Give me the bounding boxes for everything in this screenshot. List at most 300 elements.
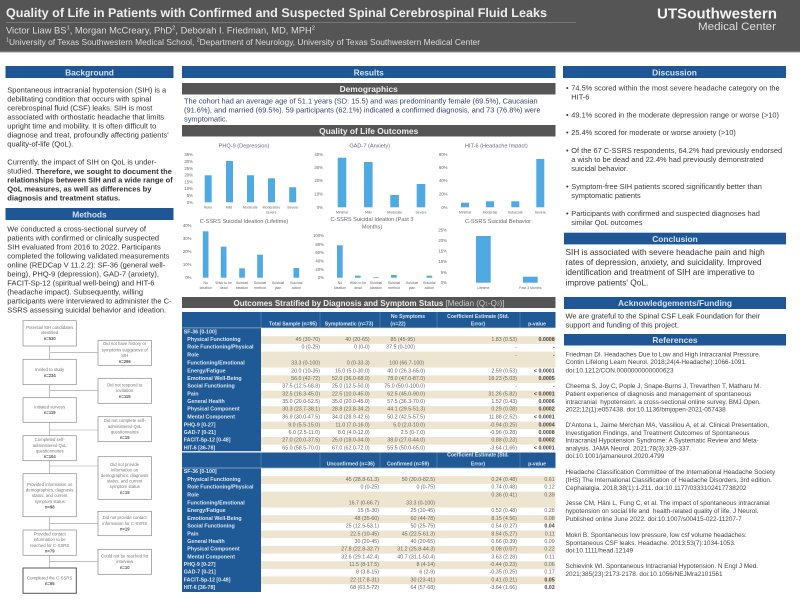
heading: outcomes stratified [182, 297, 556, 308]
list: discussion bullets: symptomatic patients [571, 191, 641, 200]
table: outcomes by symptom status: PHQ-9 [0-27] [184, 422, 216, 428]
table: outcomes by diagnosis: 27.8 (22.8-32.7) [341, 547, 379, 553]
table: outcomes by diagnosis: 8.15 (4.56) [491, 516, 517, 522]
flow box: completed questionnaires [23, 436, 76, 461]
bar chart: C-SSRS suicidal ideation lifetime: 30% [183, 236, 192, 241]
table: outcomes by diagnosis: FACIT-Sp-12 [0-48] [184, 577, 231, 583]
table: outcomes by diagnosis: PHQ-9 [0-27] [184, 562, 216, 568]
flow box: provided contact: Provided contact [34, 532, 67, 536]
heading: outcomes stratified: 1 [485, 302, 488, 308]
table: outcomes by symptom status: 57.5 (36.3-70.0) [387, 399, 425, 405]
text: background body: quality-of-life (QoL). [7, 140, 73, 148]
table: outcomes by symptom status: GAD-7 [0-21] [184, 430, 216, 436]
table: outcomes by diagnosis: Physical Component [187, 547, 240, 553]
table: outcomes by symptom status: 8.0 (4.0-12.0) [338, 430, 370, 436]
text: background body: diagnose and treat, profoundly affecting patients' [7, 130, 169, 140]
bar chart: HIT-6: 40% [439, 178, 448, 183]
text: background body [7, 86, 173, 202]
heading: quality of life outcomes [182, 125, 556, 136]
text: background body: Spontaneous intracranial hypotension (SIH) is a [7, 86, 167, 94]
table: outcomes by diagnosis: 8 (4-14) [416, 562, 435, 568]
flow box: provided demographics: symptom status [35, 499, 65, 504]
bar chart: C-SSRS suicidal behavior: 20% [438, 238, 447, 243]
list: references: Friedman DI. Headaches Due to Low and High Intracranial Pressure. [566, 352, 761, 358]
table: outcomes by symptom status: 0 (0-25) [301, 345, 320, 351]
bar chart: C-SSRS suicidal ideation lifetime: Wish to be [215, 281, 232, 285]
list: discussion bullets: 25.4% scored for moderate or worse anxiety (>10) [571, 128, 736, 137]
flow box: completed C-SSRS: Completed the C-SSRS [27, 576, 73, 580]
table: outcomes by diagnosis: 31.2 (25.8-44.3) [397, 547, 435, 553]
table: outcomes by symptom status: 0.0002 [538, 438, 555, 444]
text: acknowledgements body [566, 312, 761, 330]
table: outcomes by diagnosis: -0.44 (0.23) [490, 562, 517, 568]
flow box: invited: n=234 [44, 373, 56, 378]
flow box: no response: n=115 [119, 394, 131, 399]
bar chart: C-SSRS suicidal ideation lifetime: ideation [200, 286, 212, 290]
heading: discussion: Discussion [652, 67, 697, 77]
table: outcomes by symptom status: 52.0 (36.0-68.0) [332, 376, 370, 382]
bar chart: PHQ-9 [184, 144, 298, 214]
table: outcomes by diagnosis: GAD-7 [0-21] [184, 570, 216, 576]
text: conclusion body: improve patients' QoL. [566, 277, 648, 287]
bar chart: PHQ-9: 20% [184, 172, 193, 178]
table: outcomes by symptom status: FACIT-Sp-12 [0-48] [184, 438, 231, 444]
flow box: excluded no history: n=296 [119, 359, 131, 364]
bar chart: GAD-7: Severe [415, 210, 427, 214]
table: outcomes by symptom status: 35.0 (20.0-45.0) [332, 399, 370, 405]
table: outcomes by symptom status: - [515, 353, 517, 359]
table: outcomes by diagnosis: -0.35 (0.25) [490, 570, 517, 576]
table: outcomes by symptom status: p-value [528, 322, 546, 328]
table: outcomes by symptom status: 0.29 (0.08) [491, 407, 517, 413]
table: outcomes by symptom status: 50.2 (42.5-57.5) [387, 415, 425, 421]
text: demographics: (91.6%), and married (69.5%). 59 participants (62.1%) indicated a confirmed diagnosis, and 73 (76.8%) were [184, 106, 541, 114]
flow box: completed C-SSRS [23, 568, 76, 593]
list: discussion bullets: • [566, 182, 569, 191]
table: outcomes by symptom status: - [515, 345, 517, 351]
table: outcomes by diagnosis: 0.22 [544, 547, 555, 553]
bar chart: C-SSRS suicidal ideation past 3 months: Suicidal [370, 281, 382, 285]
table: outcomes by symptom status: Social Functioning [187, 384, 235, 390]
table: outcomes by symptom status: General Health [187, 399, 225, 405]
table: outcomes by diagnosis: Unconfirmed (n=36) [327, 461, 375, 467]
text: conclusion body: rates of depression, anxiety, and suicidality. Improved [566, 257, 762, 267]
table: outcomes by diagnosis: 11.5 (8-17.5) [349, 562, 379, 568]
list: discussion bullets: • [566, 110, 569, 120]
flow box: no demographics: Did not provide [110, 462, 140, 467]
bar chart: C-SSRS suicidal ideation past 3 months: Suicidal [423, 281, 436, 285]
heading: outcomes stratified: Outcomes Stratified by Diagnosis and Symptom Status [Median (Q [234, 298, 485, 308]
table: outcomes by diagnosis: -3.64 (1.66) [490, 585, 517, 591]
flow box: incomplete questionnaires: questionnaires [111, 430, 139, 434]
flow box: no response [98, 378, 152, 403]
authors: 1 [66, 26, 70, 32]
list: references [566, 352, 776, 578]
bar chart: C-SSRS suicidal ideation lifetime: 40% [183, 223, 192, 228]
text: background body: QoL measures, as well as differences by [7, 184, 152, 194]
table: outcomes by symptom status: 37.5 (12.5-68.8) [282, 384, 320, 390]
list: references: Jesse CM, Häni L, Fung C, et al. The impact of spontaneous intracranial [566, 500, 770, 507]
list: discussion bullets: suicidal behavior. [571, 164, 628, 173]
bar chart: C-SSRS suicidal ideation past 3 months: C-SSRS Suicidal Ideation (Past 3 [330, 217, 414, 223]
table: outcomes by diagnosis: 33.3 (0-100) [406, 501, 435, 507]
table: outcomes by diagnosis: General Health [187, 539, 225, 545]
list: discussion bullets: • [566, 209, 569, 218]
flow box: not reached: n=10 [120, 565, 130, 570]
table: outcomes by symptom status: 56.0 (42-72) [291, 376, 320, 382]
table: outcomes by symptom status: 25.0 (12.5-50.0) [332, 384, 370, 390]
table: outcomes by symptom status: 37.5 (0-100) [386, 345, 415, 351]
bar chart: C-SSRS suicidal ideation past 3 months: 0% [318, 275, 324, 280]
list: references: intracranial hypotension: a cross-sectional online survey. BMJ Open. [566, 399, 761, 406]
table: outcomes by symptom status: Physical Component [187, 407, 240, 413]
table: outcomes by symptom status: - [553, 384, 555, 390]
flow box: excluded no history [98, 340, 152, 365]
table: outcomes by symptom status: Physical Functioning [187, 337, 241, 343]
table: outcomes by diagnosis: Mental Component [187, 554, 235, 560]
table: outcomes by symptom status: < 0.0001 [534, 446, 555, 452]
heading: outcomes stratified: )] [500, 298, 504, 308]
flow box: candidates: n=530 [44, 336, 56, 341]
flow box: no demographics: demographics, diagnosis [101, 473, 148, 478]
bar chart: PHQ-9: Moderate [243, 206, 258, 210]
table: outcomes by diagnosis: 0.03 [544, 585, 555, 591]
table: outcomes by diagnosis: 8.54 (5.27) [491, 531, 517, 537]
flow box: completed questionnaires: administered QoL [33, 443, 67, 448]
table: outcomes by symptom status: Symptomatic (n=73) [325, 322, 374, 328]
list: references: Cheema S, Joy C, Pople J, Snape-Burns J, Trevarthen T, Matharu M. [566, 383, 761, 390]
bar chart: GAD-7: 40% [314, 152, 323, 157]
bar chart: GAD-7: GAD-7 (Anxiety) [349, 144, 390, 150]
flow box: no demographics: n=15 [120, 490, 130, 495]
bar chart: GAD-7: Moderate [387, 210, 402, 214]
table: outcomes by diagnosis: Emotional Well-Being [187, 516, 242, 522]
table: outcomes by symptom status: Emotional Well-Being [187, 376, 242, 382]
bar chart: GAD-7: 0% [317, 205, 323, 210]
panel: acknowledgements [564, 297, 786, 330]
bar chart: GAD-7: 10% [314, 192, 323, 196]
list: discussion bullets: similar QoL outcomes [571, 218, 643, 227]
flow box: initiated surveys: Initiated surveys [34, 404, 65, 410]
list: discussion bullets: Participants with confirmed and suspected diagnoses had [571, 209, 760, 218]
table: outcomes by symptom status: 9.0 (5.5-15.0) [288, 422, 320, 428]
table: outcomes by diagnosis: 0.24 (0.48) [491, 477, 517, 483]
text: conclusion body [566, 247, 765, 287]
text: acknowledgements body: support and funding of this project. [566, 320, 679, 330]
bar chart: C-SSRS suicidal ideation past 3 months: Suicidal [406, 281, 418, 285]
authors: Victor Liaw BS [6, 26, 66, 36]
table: outcomes by symptom status: Pain [187, 391, 198, 397]
table: outcomes by diagnosis: 50 (25-75) [411, 524, 435, 530]
heading: results [182, 66, 556, 78]
panel: methods [6, 208, 174, 593]
list: discussion bullets: HIT-6 [571, 92, 589, 102]
heading: methods: Methods [72, 209, 107, 219]
affiliations: 2 [197, 38, 200, 44]
panel: references [564, 334, 786, 578]
flow box: initiated surveys [23, 398, 76, 422]
list: references: analysis. JAMA Neurol. 2021;78(3):329-337. [566, 446, 691, 452]
table: outcomes by symptom status: 22.5 (10.0-45.0) [332, 391, 370, 397]
flow box: no response: invitation [116, 388, 134, 393]
bar chart: C-SSRS suicidal behavior: 10% [438, 259, 447, 264]
bar chart: C-SSRS suicidal ideation past 3 months: ideation [334, 286, 346, 290]
table: outcomes by diagnosis: 0.08 (0.07) [491, 547, 517, 553]
bar chart: HIT-6: 60% [439, 165, 448, 170]
flow box: excluded no history: Did not have history or [103, 341, 147, 346]
flow box: provided contact [23, 530, 76, 555]
table: outcomes by symptom status: Role [187, 353, 199, 359]
table: outcomes by symptom status: 15.0 (5.0-30.0) [335, 368, 370, 374]
logo: UT Southwestern Medical Center [657, 6, 777, 33]
bar chart: C-SSRS suicidal behavior: 25% [438, 228, 447, 232]
table: outcomes by symptom status: 36.9 (30.0-47.5) [282, 415, 320, 421]
table: outcomes by symptom status: 65.0 (58.5-70.0) [282, 446, 320, 452]
bar chart: C-SSRS suicidal ideation lifetime: 10% [183, 262, 192, 267]
table: outcomes by diagnosis: Role [187, 492, 199, 498]
bar chart: C-SSRS suicidal ideation past 3 months: 40% [315, 258, 324, 264]
table: outcomes by diagnosis: 0.39 [544, 492, 555, 498]
table: outcomes by symptom status: - [553, 345, 555, 351]
bar chart: HIT-6: 0% [441, 205, 448, 210]
list: references: Patient experience of diagnosis and management of spontaneous [566, 391, 751, 398]
table: outcomes by diagnosis [182, 452, 556, 592]
text: methods body: We conducted a cross-sectional survey of [7, 224, 147, 234]
bar chart: C-SSRS suicidal ideation past 3 months: plan [409, 286, 415, 290]
flow box: incomplete questionnaires: administered QoL [108, 424, 142, 429]
text: methods body: online (REDCap V 11.2.2): SF-36 (general well- [7, 260, 166, 270]
bar chart: HIT-6: Minimal [459, 210, 471, 214]
bar chart: PHQ-9: None [204, 206, 212, 210]
table: outcomes by symptom status [182, 312, 556, 452]
bar chart: C-SSRS suicidal ideation lifetime: C-SSRS Suicidal Ideation (Lifetime) [200, 219, 288, 225]
table: outcomes by symptom status: 20.0 (10-35) [291, 368, 320, 374]
text: background body: upright time and mobility. It is often difficult to [7, 122, 156, 130]
flow box: no response: Did not respond to [107, 382, 143, 388]
list: references: Schievink WI. Spontaneous Intracranial Hypotension. N Engl J Med. [566, 563, 758, 570]
bar chart: GAD-7: 30% [314, 165, 323, 170]
flow box: completed questionnaires: questionnaires [36, 448, 64, 454]
flow box: provided demographics: demographics, diagnosis [26, 488, 73, 492]
flow box: initiated surveys: n=119 [44, 410, 56, 415]
authors: 2 [312, 26, 315, 32]
table: outcomes by symptom status: 27.0 (20.0-37.5) [282, 438, 320, 444]
table: outcomes by symptom status: 45 (30-70) [296, 337, 320, 343]
table: outcomes by diagnosis: Social Functioning [187, 524, 235, 530]
list: discussion bullets: • [566, 146, 569, 155]
flow box: not reached [98, 549, 152, 574]
table: outcomes by symptom status: -0.94 (0.25) [490, 422, 517, 428]
table: outcomes by diagnosis: 50 (30.0-82.5) [402, 477, 435, 483]
bar chart: C-SSRS suicidal behavior: 15% [438, 248, 447, 254]
heading: demographics: Demographics [340, 84, 398, 94]
table: outcomes by diagnosis: 0.11 [545, 531, 555, 537]
table: outcomes by symptom status: Role Functioning/Physical [187, 345, 254, 351]
bar chart: GAD-7: Minimal [336, 210, 348, 214]
bar chart: PHQ-9: 35% [184, 152, 193, 157]
text: background body: diagnosis and treatment status. [7, 194, 120, 202]
list: discussion bullets: Of the 67 C-SSRS respondents, 64.2% had previously endorsed [571, 146, 782, 155]
table: outcomes by diagnosis: Physical Functioning [187, 477, 241, 483]
bar chart: C-SSRS suicidal ideation past 3 months: action [425, 286, 434, 290]
text: methods body [7, 224, 172, 314]
table: outcomes by symptom status: 75.0 (50.0-100.0) [384, 384, 425, 390]
table: outcomes by diagnosis: 40.7 (31.1-50.4) [397, 554, 435, 560]
table: outcomes by diagnosis: Energy/Fatigue [187, 508, 226, 514]
table: outcomes by symptom status: (n=22) [390, 322, 406, 328]
flow box: completed questionnaires: Completed self- [35, 437, 65, 442]
bar chart: C-SSRS suicidal ideation lifetime: ideation [236, 286, 248, 290]
table: outcomes by symptom status: 100 (66.7-100) [389, 361, 424, 367]
table: outcomes by symptom status: 11.88 (2.52) [489, 415, 517, 421]
table: outcomes by diagnosis: 25 (12.5-53.1) [346, 524, 379, 530]
list: discussion bullets [566, 84, 782, 227]
text: background body: studied. Therefore, we sought to document the [7, 166, 172, 176]
bar chart: C-SSRS suicidal ideation lifetime: Suicidal [236, 281, 248, 285]
bar chart: PHQ-9: PHQ-9 (Depression) [219, 144, 269, 150]
table: outcomes by symptom status: Functioning/Emotional [187, 361, 245, 367]
flow box: provided demographics: status, and current [32, 493, 68, 498]
flow box: not reached: Could not be reached for [101, 554, 149, 558]
bar chart: C-SSRS suicidal ideation lifetime: 0% [185, 275, 192, 280]
flow box: no demographics: symptom status [110, 484, 140, 489]
table: outcomes by diagnosis: 0.08 [544, 516, 555, 522]
list: references: 2021;385(23):2173-2178. doi:10.1056/NEJMra2101561 [566, 571, 723, 578]
table: outcomes by diagnosis: 0.12 [544, 485, 555, 491]
table: outcomes by symptom status: Mental Component [187, 415, 235, 421]
bar chart: C-SSRS suicidal ideation lifetime: Suicidal [290, 281, 303, 285]
bar chart: C-SSRS suicidal ideation past 3 months: ideation [370, 286, 382, 290]
authors: 2 [172, 26, 175, 32]
bar chart: C-SSRS suicidal ideation past 3 months: Suicidal [388, 281, 400, 285]
table: outcomes by symptom status: 40.0 (26.3-65.0) [387, 368, 425, 374]
table: outcomes by symptom status: HIT-6 [36-78] [184, 446, 215, 452]
authors: , Deborah I. Friedman, MD, MPH [175, 26, 312, 36]
table: outcomes by symptom status: 35.0 (20.0-52.5) [282, 399, 320, 405]
list: references: Mokri B. Spontaneous low pressure, low csf volume headaches: [566, 532, 747, 539]
bar chart: PHQ-9: 5% [187, 193, 193, 198]
bar chart: PHQ-9: Moderately [263, 206, 280, 210]
bar chart: HIT-6: Severe [535, 210, 546, 214]
table: outcomes by diagnosis: 68 (63.5-72) [350, 585, 379, 591]
table: outcomes by symptom status: 85 (45-95) [391, 337, 415, 343]
table: outcomes by diagnosis: Error) [471, 461, 485, 467]
header banner [0, 0, 800, 52]
table: outcomes by diagnosis: 45 (22.5-61.3) [402, 531, 435, 537]
flow box: provided demographics: Provided information on [27, 482, 73, 487]
bar chart: C-SSRS suicidal ideation past 3 months: 100% [313, 233, 324, 238]
table: outcomes by symptom status: 34.0 (28.9-42.6) [332, 415, 370, 421]
list: discussion bullets: 49.1% scored in the moderate depression range or worse (>10) [571, 110, 779, 120]
bar chart: C-SSRS suicidal behavior: 0% [441, 280, 447, 285]
bar chart: GAD-7: Mild [365, 210, 372, 214]
table: outcomes by symptom status: - [553, 353, 555, 359]
flow box: incomplete questionnaires: n=15 [120, 435, 130, 440]
list: references: doi:10.1212/CON.0000000000000623 [566, 368, 674, 374]
flowchart: participant selection [23, 321, 152, 593]
list: discussion bullets: a wish to be dead and 22.4% had previously demonstrated [571, 155, 764, 164]
table: outcomes by diagnosis: 60 (44-78) [411, 516, 435, 522]
flow box: completed questionnaires: n=104 [44, 454, 56, 459]
bar chart: C-SSRS suicidal ideation past 3 months: 20% [315, 267, 324, 272]
table: outcomes by diagnosis: SF-36 [0-100] [184, 469, 217, 475]
table: outcomes by diagnosis: 25 (10-45) [411, 508, 435, 514]
table: outcomes by diagnosis: HIT-6 [36-78] [184, 585, 215, 591]
flow box: provided demographics [23, 474, 76, 517]
flow box: invited: Invited to study [35, 367, 65, 372]
flow box: incomplete questionnaires: Did not complete self- [104, 418, 146, 423]
table: outcomes by symptom status: No Symptoms [391, 314, 425, 320]
flow box: no contact information [98, 511, 152, 536]
table: outcomes by diagnosis: 22 (17.8-31) [350, 577, 379, 583]
bar chart: C-SSRS suicidal ideation lifetime: 20% [183, 249, 192, 254]
flow box: completed C-SSRS: n=65 [45, 581, 55, 586]
affiliations: Department of Neurology, University of Texas Southwestern Medical Center [200, 38, 480, 46]
heading: quality of life outcomes: Quality of Life Outcomes [319, 126, 419, 136]
flow box: incomplete questionnaires [98, 417, 152, 442]
heading: methods [6, 208, 174, 220]
text: acknowledgements body: We are grateful to the Spinal CSF Leak Foundation for their [566, 312, 761, 320]
flow box: candidates [23, 321, 76, 346]
table: outcomes by symptom status: 31.26 (5.82) [488, 391, 517, 397]
table: outcomes by symptom status: 0.0008 [538, 337, 555, 343]
list: discussion bullets: • [566, 128, 569, 137]
bar chart: C-SSRS suicidal ideation lifetime [183, 219, 303, 290]
bar chart: PHQ-9: 30% [184, 159, 193, 164]
flow box: provided contact: reached for C-SSRS [30, 543, 69, 548]
heading: references: References [652, 335, 698, 345]
bar chart: C-SSRS suicidal behavior: Past 3 Months [519, 286, 542, 290]
list: references: D'Antona L, Jaime Merchan MA, Vassiliou A, et al. Clinical Presentation, [566, 422, 769, 429]
text: background body: relationships between SIH and a wide range of [7, 176, 173, 184]
bar chart: C-SSRS suicidal behavior [438, 219, 542, 290]
list: references: Headache Classification Committee of the International Headache Society [566, 469, 776, 476]
table: outcomes by diagnosis: 0.09 [544, 539, 555, 545]
text: methods body: participants were interviewed to administer the C- [7, 296, 172, 306]
list: references: Contin Lifelong Learn Neurol. 2018;24(4-Headache):1066-1091. [566, 359, 747, 366]
table: outcomes by diagnosis: 0.17 [544, 570, 555, 576]
bar chart: C-SSRS suicidal ideation lifetime: method [254, 286, 266, 290]
flow box: provided contact: information to be [34, 537, 66, 542]
panel: background [6, 66, 174, 202]
table: outcomes by symptom status: 62.5 (45.0-90.0) [387, 391, 425, 397]
table: outcomes by symptom status: < 0.0001 [534, 391, 555, 397]
heading: references [564, 334, 786, 346]
table: outcomes by symptom status: 30.3 (23.7-38.1) [282, 407, 320, 413]
bar chart: C-SSRS suicidal ideation lifetime: No [203, 281, 208, 285]
list: references: Intracranial Hypotension Syndrome: A Systematic Review and Meta- [566, 438, 759, 444]
flow box: no demographics [98, 457, 152, 499]
list: discussion bullets: 74.5% scored within the most severe headache category on the [571, 84, 780, 92]
bar chart: HIT-6: Subacute [508, 210, 523, 214]
bar chart: C-SSRS suicidal ideation lifetime: dead [220, 286, 228, 290]
table: outcomes by diagnosis: 30 (23-41) [411, 577, 435, 583]
heading: acknowledgements [564, 297, 786, 309]
bar chart: C-SSRS suicidal ideation past 3 months: method [388, 286, 400, 290]
table: outcomes by symptom status: 44.1 (29.5-51.3) [387, 407, 425, 413]
bar chart: C-SSRS suicidal behavior: Lifetime [477, 286, 489, 290]
table: outcomes by diagnosis: 0.05 [544, 577, 555, 583]
table: outcomes by symptom status: 55.5 (50.0-65.0) [387, 446, 425, 452]
text: methods body: SSRS assessing suicidal behavior and ideation. [7, 306, 166, 314]
table: outcomes by symptom status: 2.5 (0-7.0) [401, 430, 425, 436]
flow box: no contact information: Did not provide contact [103, 515, 147, 520]
table: outcomes by diagnosis: 0.52 (0.48) [491, 508, 517, 514]
table: outcomes by diagnosis: Pain [187, 531, 198, 537]
heading: outcomes stratified: 3 [497, 302, 500, 308]
table: outcomes by diagnosis: 22.5 (10-45) [350, 531, 379, 537]
list: references: hypotension on social life and health-related quality of life. J Neurol. [566, 508, 759, 515]
